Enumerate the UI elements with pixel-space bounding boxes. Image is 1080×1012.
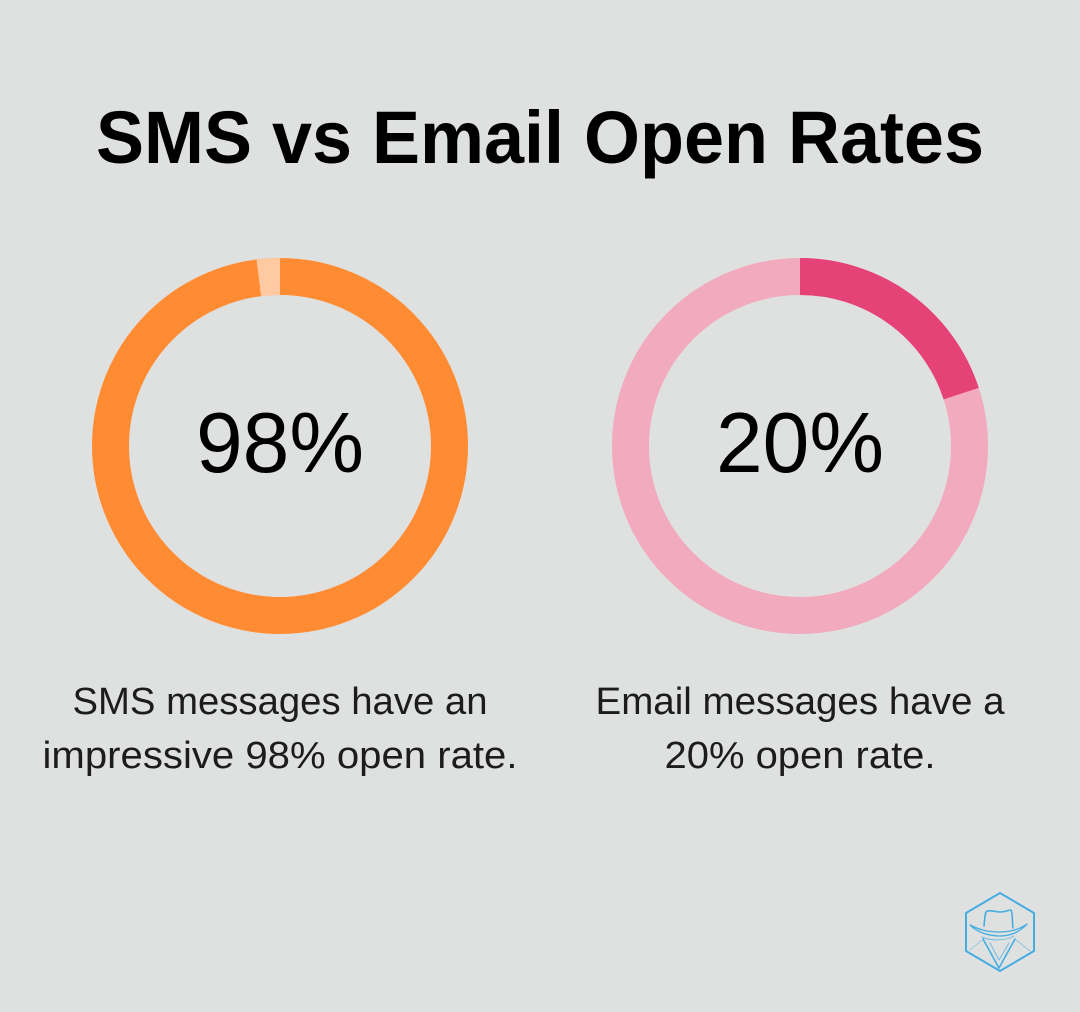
Email caption: Email messages have a	[596, 681, 1005, 723]
icon: logo hexagon with hat and coat figure	[966, 893, 1034, 971]
donut chart: Email 20%	[630, 276, 970, 616]
donut chart: SMS 98%	[110, 276, 450, 616]
SMS caption: SMS messages have an	[72, 681, 488, 723]
Email caption	[596, 681, 1005, 777]
Email caption: 20% open rate.	[664, 735, 936, 777]
title: SMS vs Email Open Rates	[96, 96, 984, 179]
SMS caption	[42, 681, 518, 777]
SMS caption: impressive 98% open rate.	[42, 735, 518, 777]
Email percentage value: 20%	[716, 396, 884, 491]
panel: SMS open rate	[42, 276, 518, 777]
SMS percentage value: 98%	[196, 396, 364, 491]
panel: Email open rate	[596, 276, 1005, 777]
